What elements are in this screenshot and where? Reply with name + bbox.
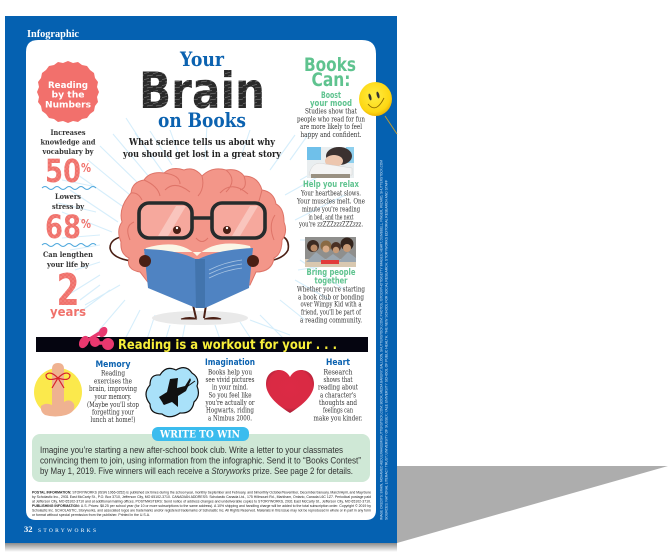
- fine print: or format without special permission from the publisher. Printed in the U.S.A.: [32, 512, 150, 517]
- subtitle: What science tells us about why: [128, 138, 276, 148]
- white panel: [26, 40, 376, 520]
- books can: help you relax: Your heartbeat slows.: [300, 190, 361, 198]
- black banner: Reading is a workout for your . . .: [118, 338, 337, 353]
- title: [139, 47, 265, 132]
- arms: [110, 236, 288, 262]
- fine print: POSTAL INFORMATION: STORYWORKS (ISSN 1066-0252) is published six times during the school year, monthly September and February, and bimonthly October/November, December/January, March/April, and May/June: [32, 490, 372, 494]
- page footer: STORYWORKS: [38, 528, 96, 534]
- brain folds: [128, 170, 275, 240]
- brain body: [119, 169, 286, 285]
- stat: 50 percent: knowledge and: [40, 138, 96, 146]
- column: heart: Heart: [326, 358, 350, 368]
- column: memory: your memory.: [94, 393, 132, 401]
- books can: help you relax: [296, 180, 365, 228]
- books can: bring people together: together: [314, 276, 348, 286]
- title: on Books: [158, 108, 246, 132]
- wave divider: [42, 244, 96, 246]
- fine print: PUBLISHING INFORMATION: U.S. Prices: $8.25 per school year (for 10 or more subscriptions to the same address). A 10% shipping and handling charge will be added to the total subscription order. Copyright © 2019 by: [32, 503, 371, 508]
- title: Your: [179, 47, 224, 71]
- legs: [193, 305, 206, 318]
- column: memory: (Maybe you'll stop: [87, 401, 139, 409]
- stat: 2 years: your life by: [46, 260, 90, 269]
- fine print: by Scholastic Inc., 2931 East McCarty St., P.O. Box 3710, Jefferson City, MO 65102-3710. CANADIAN ADDRESS: Scholastic Canada Ltd., 175 Hillmount Rd., Markham, Ontario, Canada L6C 1Z7. Periodical postage paid: [32, 494, 371, 499]
- books can: bring people together: [297, 268, 365, 324]
- balloon icon: [359, 82, 397, 134]
- books can: bring people together: over Wimpy Kid with a: [300, 300, 362, 308]
- photo: boy asleep on book: [307, 147, 354, 178]
- stat: 50 percent: 50: [45, 152, 81, 190]
- stat: 50 percent: [40, 128, 96, 190]
- books can: help you relax: minute you're reading: [302, 206, 360, 214]
- fine print: Scholastic Inc. SCHOLASTIC, Storyworks, and associated logos are trademarks and/or registered trademarks of Scholastic Inc. All Rights Reserved. Materials in this issue may not be reproduced in whole or in part in any form: [32, 508, 372, 512]
- column: imagination: So you feel like: [208, 392, 252, 400]
- vertical credits: [380, 160, 388, 520]
- column: heart: make you kinder.: [314, 414, 362, 422]
- heading: books can: [304, 54, 356, 91]
- column: memory: brain, improving: [89, 385, 137, 393]
- contest box: by May 1, 2019. Five winners will each receive a Storyworks prize. See page 2 for details.: [40, 465, 353, 476]
- section label: Infographic: [27, 29, 79, 40]
- subtitle: you should get lost in a great story: [122, 150, 282, 160]
- stat: 68 percent: %: [81, 217, 91, 231]
- vertical credits: IMAGE CREDITS: BRAIN, MOHAMED ABDULRAHEEM/SHUTTERSTOCK.COM; BOOK, MEDIA BAKERY; BALLOON, SHUTTERSTOCK.COM; PHOTOS, ISTOCKPHOTO/GETTY IMAGES; HEART, DUMBBELL, FINGER, WIZARD, SHUTTERSTOCK.COM: [380, 160, 384, 520]
- stat: 2 years: 2: [56, 265, 80, 316]
- contest box: [32, 434, 370, 482]
- books can: bring people together: Whether you're starting: [297, 286, 365, 294]
- stat: 2 years: years: [50, 305, 86, 319]
- column: heart: feelings can: [323, 406, 353, 414]
- column: imagination: in your mind.: [212, 384, 248, 392]
- badge: reading by the numbers: Reading: [48, 80, 88, 91]
- books can: bring people together: a reading community.: [300, 316, 362, 324]
- page footer: [24, 524, 96, 534]
- column: heart: [314, 358, 362, 422]
- fine print: at Jefferson City, MO 65102-3710 and at additional mailing offices. POSTMASTERS: Send notice of address changes and undeliverable copies to STORYWORKS, 2931 East McCarty St., Jefferson City, MO 65102-3710.: [32, 498, 371, 504]
- books can: boost your mood: [297, 91, 365, 139]
- stat: 50 percent: Increases: [50, 128, 86, 137]
- blue magazine page: [5, 16, 397, 543]
- books can: boost your mood: people who read for fun: [297, 116, 365, 124]
- subtitle: [122, 138, 282, 160]
- books can: boost your mood: your mood: [310, 99, 352, 109]
- column: imagination: [205, 358, 255, 422]
- column: memory: Reading: [101, 370, 125, 378]
- books can: boost your mood: happy and confident.: [300, 131, 362, 139]
- brain character: [110, 169, 288, 325]
- books can: help you relax: Your muscles melt. One: [296, 198, 365, 206]
- glasses: [139, 203, 265, 238]
- column: memory: [87, 360, 139, 424]
- books can: boost your mood: are more likely to feel: [300, 123, 363, 131]
- column: heart: Research: [324, 368, 353, 376]
- column: imagination: see vivid pictures: [206, 376, 255, 384]
- icon: dumbbell: [77, 325, 114, 350]
- icon: cloud with wizard on broomstick: [146, 368, 198, 417]
- stat: 50 percent: vocabulary by: [42, 147, 94, 156]
- page shadow: [5, 466, 668, 552]
- badge: reading by the numbers: by the: [52, 90, 84, 100]
- badge: reading by the numbers: Numbers: [45, 100, 92, 110]
- column: imagination: Books help you: [208, 368, 252, 376]
- column: imagination: Imagination: [205, 358, 255, 368]
- icon: finger with red string: [34, 363, 82, 416]
- write to win tab: WRITE TO WIN: [159, 428, 240, 440]
- background rays: [58, 118, 345, 345]
- books can: bring people together: Bring people: [306, 268, 356, 278]
- books can: boost your mood: Studies show that: [305, 108, 357, 116]
- column: heart: shows that: [324, 376, 353, 384]
- column: heart: reading about: [318, 384, 358, 392]
- shadow: [152, 311, 248, 325]
- books can: help you relax: you're zzZZZzzzZZZzzz.: [298, 220, 363, 228]
- icon: heart: [266, 370, 314, 413]
- column: imagination: Hogwarts, riding: [206, 406, 254, 414]
- stat: 68 percent: stress by: [52, 202, 85, 211]
- stat: 68 percent: Lowers: [55, 192, 81, 201]
- column: imagination: you're actually or: [205, 399, 255, 407]
- column: memory: exercises the: [94, 378, 132, 386]
- books can: bring people together: a book club or bonding: [298, 294, 364, 302]
- stat: 2 years: Can lengthen: [43, 250, 93, 259]
- column: heart: a character's: [320, 392, 356, 400]
- title: Brain: [139, 62, 265, 120]
- contest box: convincing them to join, using information from the infographic. Send it to “Books Contest”: [40, 454, 361, 466]
- page footer: 32: [24, 524, 32, 534]
- book pages: [144, 244, 252, 256]
- hands: [139, 255, 151, 267]
- column: memory: forgetting your: [92, 408, 134, 416]
- book: [144, 248, 253, 308]
- badge: reading by the numbers: [37, 61, 99, 123]
- column: imagination: a Nimbus 2000.: [208, 414, 252, 422]
- heading: books can: Can:: [312, 69, 350, 91]
- photo: kids reading together: [305, 237, 356, 267]
- column: memory: Memory: [96, 360, 131, 370]
- contest box: Imagine you’re starting a new after-school book club. Write a letter to your classmates: [40, 444, 343, 455]
- stat: 68 percent: 68: [45, 208, 81, 246]
- vertical credits: SOURCES: NATIONAL LITERACY TRUST; UNIVERSITY OF SUSSEX; YALE UNIVERSITY SCHOOL OF PUBLIC HEALTH; THE NEW SCHOOL FOR SOCIAL RESEARCH; STORYWORKS EDITORIAL RESEARCH AND STAFF: [384, 179, 388, 520]
- books can: help you relax: Help you relax: [303, 180, 359, 190]
- books can: help you relax: in bed, and the next: [308, 214, 354, 222]
- black banner: [36, 337, 368, 353]
- stat: 68 percent: [45, 192, 91, 246]
- wave divider: [42, 186, 96, 190]
- fine print: [32, 490, 372, 517]
- books can: bring people together: friend, you'll be part of: [301, 308, 362, 316]
- eyes and smile: [173, 226, 181, 234]
- stat: 2 years: [43, 250, 93, 319]
- heading: books can: Books: [304, 54, 356, 76]
- column: heart: thoughts and: [319, 399, 357, 407]
- stat: 50 percent: %: [81, 161, 91, 175]
- books can: boost your mood: Boost: [321, 91, 341, 101]
- column: memory: lunch at home!): [90, 416, 136, 424]
